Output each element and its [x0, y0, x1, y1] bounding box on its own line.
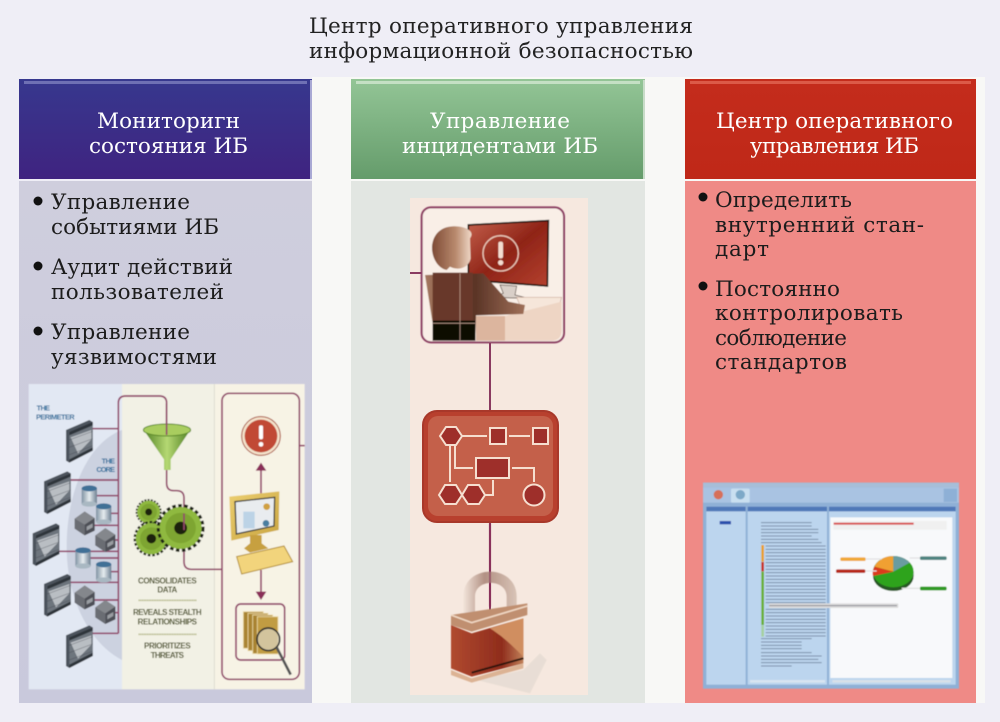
- icon: workflow: [423, 411, 558, 522]
- screenshot: monitoring software: [703, 483, 959, 689]
- header: operations center: управления ИБ: [750, 134, 919, 159]
- bullet list: operations center: [698, 188, 924, 375]
- alert: [242, 417, 280, 455]
- bullet list: operations center: дарт: [715, 237, 769, 262]
- panel: incident management: [351, 79, 645, 703]
- diagram: security data flow: PERIMETER: [36, 412, 75, 421]
- bullet list: monitoring: [34, 190, 233, 370]
- header: incident management: Управление: [430, 109, 570, 134]
- bullet list: operations center: Постоянно: [715, 277, 840, 302]
- bullet list: operations center: контролировать: [715, 301, 903, 326]
- header: monitoring: Мониторигн: [97, 109, 240, 134]
- panel: operations center: [685, 79, 976, 703]
- column backdrop: [312, 77, 985, 703]
- bullet list: operations center: внутренний стан-: [715, 213, 924, 238]
- bullet list: monitoring: уязвимостями: [51, 345, 217, 370]
- funnel: [143, 429, 191, 470]
- header: incident management: [351, 79, 645, 179]
- gears: [137, 500, 160, 524]
- captions: DATA: [157, 586, 178, 595]
- captions: CONSOLIDATES: [138, 576, 197, 585]
- captions: THREATS: [151, 651, 185, 660]
- diagram: security data flow: [29, 384, 305, 689]
- diagram: security data flow: CORE: [96, 465, 115, 474]
- bullet list: monitoring: пользователей: [51, 280, 224, 305]
- diagram: security data flow: THE: [37, 404, 50, 413]
- header: monitoring: состояния ИБ: [89, 134, 248, 159]
- bullet list: monitoring: событиями ИБ: [51, 215, 219, 240]
- bullet list: operations center: соблюдение: [715, 326, 847, 351]
- captions: [133, 576, 202, 660]
- computer: [229, 491, 279, 541]
- panel: monitoring: [19, 79, 312, 703]
- header: operations center: [685, 79, 976, 179]
- captions: PRIORITIZES: [144, 642, 191, 651]
- connector lines: [410, 273, 490, 610]
- title: информационной безопасностью: [309, 39, 693, 64]
- bullet list: monitoring: Управление: [51, 320, 190, 345]
- storage: [82, 485, 97, 507]
- title: Центр оперативного управления: [309, 14, 693, 39]
- bullet list: operations center: Определить: [715, 188, 852, 213]
- bullet list: operations center: стандартов: [715, 350, 847, 375]
- firewalls: [66, 420, 93, 463]
- illustration background: [410, 198, 588, 695]
- title: [309, 14, 693, 64]
- icon: operator at monitor: [422, 207, 564, 342]
- icon: padlock: [451, 523, 547, 693]
- diagram: security data flow: THE: [102, 456, 115, 465]
- header: monitoring: [19, 79, 312, 179]
- documents: [243, 612, 278, 654]
- bullet list: monitoring: Управление: [51, 190, 190, 215]
- captions: RELATIONSHIPS: [138, 617, 198, 626]
- header: incident management: инцидентами ИБ: [402, 134, 598, 159]
- header: operations center: Центр оперативного: [716, 109, 953, 134]
- bullet list: monitoring: Аудит действий: [51, 255, 233, 280]
- captions: REVEALS STEALTH: [133, 608, 202, 617]
